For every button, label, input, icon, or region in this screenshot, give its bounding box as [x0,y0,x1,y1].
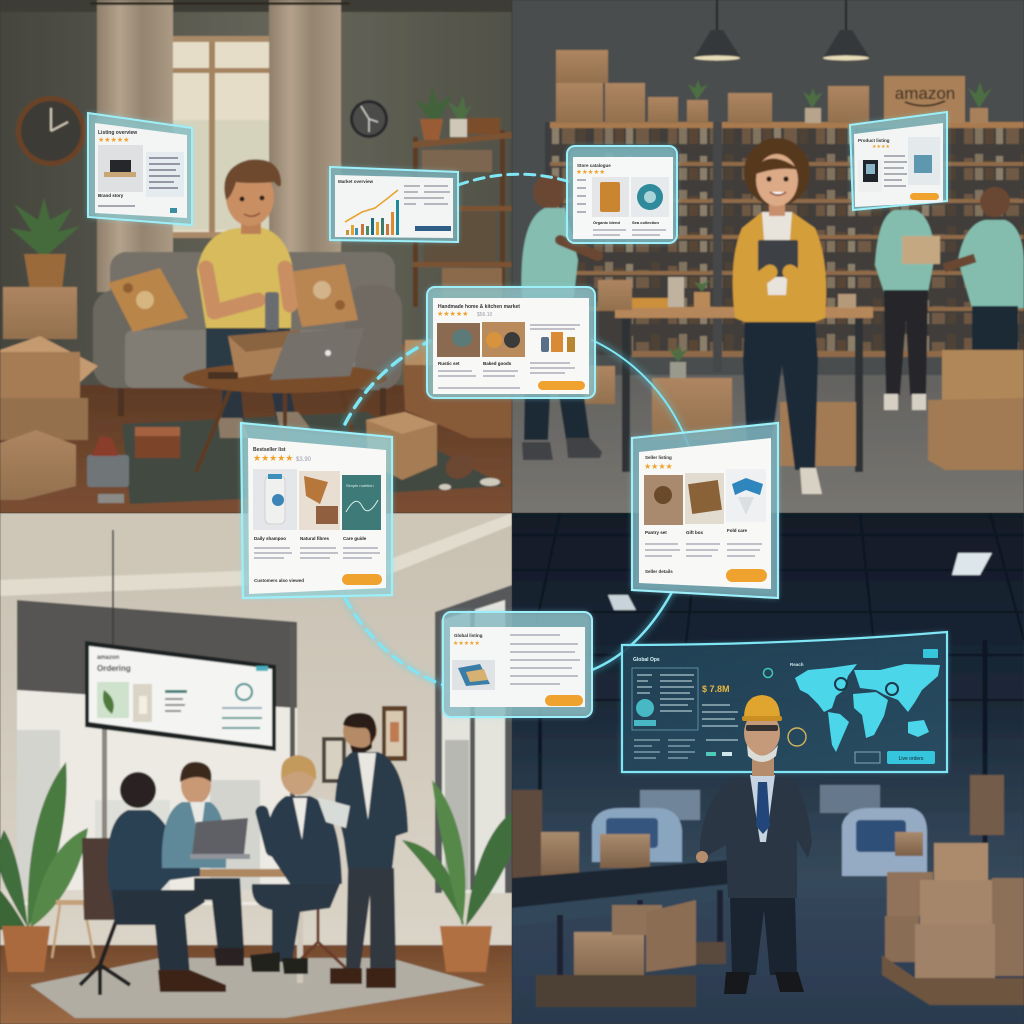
icon: small wall clock [350,100,388,138]
floating listing card right [632,423,778,598]
floating listing card 1: Listing overview [98,130,137,136]
wall monitor: Ordering [97,664,131,673]
floating analytics card with bar chart: Market overview [338,179,374,184]
floating listing card right: Pantry set [645,530,667,535]
right window [435,585,512,893]
floating listing card 3: ★★★★★ [576,168,605,176]
floating listing card 3: Store catalogue [577,163,611,168]
man in teal shirt, left [521,175,602,460]
sofa [93,252,402,416]
floor [512,375,1024,513]
parcels in front of the conveyor [536,900,726,1007]
boxes on the floor [585,350,1024,470]
floating listing card 4: Product listing [858,138,890,143]
rug [122,412,505,504]
connector: dashed glowing ring [345,174,690,685]
holographic world map dashboard [622,632,947,772]
hanging lamps [694,0,870,60]
woman in yellow cardigan [733,138,826,494]
top-shelf boxes [556,50,992,123]
floating listing card right: Seller details [645,569,673,574]
table [52,869,322,983]
box and tube on rug [87,412,500,503]
floating listing card 1 [88,113,192,225]
floating listing card lower left: Natural fibres [300,536,330,541]
floating listing card lower left: Bestseller list [253,447,286,453]
curtains [90,0,350,292]
stacked parcels on pallet [882,843,1024,1005]
packing machines [592,808,927,876]
floating listing card centre: Baked goods [483,361,512,366]
hanging pendant cable [112,530,114,645]
floating listing card right: Gift box [686,530,703,535]
work table [598,277,873,472]
shelving [545,122,1024,372]
cushions [108,264,358,332]
floor [0,945,512,1024]
panel: home seller room (top left) [0,0,512,513]
floating listing card lower left: Care guide [343,536,367,541]
large window with blind [0,600,300,905]
floating listing card centre: $56.10 [477,312,493,318]
holographic world map dashboard: $ 7.8M [702,684,730,694]
floating listing card lower left: Simple nutrition [346,483,374,488]
floating listing card centre: ★★★★★ [437,310,468,318]
floating listing card 4 [850,112,947,210]
floating listing card 3: Sea collection [632,220,659,225]
floor [0,385,512,513]
rug [30,958,485,1018]
roof beams [512,513,1024,890]
background wall windows [512,775,1004,880]
floating analytics card with bar chart [330,167,458,242]
shelf plants [415,86,472,140]
floating listing card lower left [241,423,392,598]
wall monitor: amazon [97,655,120,661]
holographic world map dashboard: Live orders [899,756,924,762]
world map [795,664,940,752]
floating listing card right: ★★★★ [644,462,673,471]
wall monitor [85,641,276,751]
team member with blonde hair [250,755,350,974]
floating listing card lower centre: ★★★★★ [453,640,480,647]
coffee table with box and laptop [183,328,387,472]
floating listing card centre: Handmade home & kitchen market [438,304,520,310]
team member with laptop [162,762,250,966]
shelf unit [413,118,512,308]
man in hard hat and suit [696,695,812,994]
factory floor [512,888,1024,1024]
floating listing card 4: ★★★★ [872,144,890,150]
floating listing card lower centre [443,612,592,717]
floating listing card centre: Rustic set [438,361,460,366]
floating listing card lower left: Customers also viewed [254,578,304,583]
man in yellow t-shirt [197,159,310,438]
amazon box: amazon [895,84,955,103]
floating listing card lower centre: Global listing [454,633,483,638]
floating listing card 1: ★★★★★ [98,136,129,144]
icon: large wall clock [16,96,86,166]
conveyor belt [512,860,730,990]
cardboard boxes, left stack [0,287,98,500]
floating listing card 1: Brand story [98,193,124,198]
window [172,35,270,239]
panel: warehouse shelf room (top right) [512,0,1024,513]
plant, left [0,762,88,972]
person holding a parcel [875,210,940,410]
team member seated from behind [80,772,226,995]
floating listing card lower left: ★★★★★ [253,453,293,463]
small parcels on belts [541,832,923,876]
amazon box [884,76,965,123]
floating listing card 3 [567,146,677,243]
panel: office meeting room (bottom left) [0,513,512,1024]
floating listing card lower left: Daily shampoo [254,536,286,541]
wall frames [322,706,407,783]
man on far right [944,187,1024,350]
floating listing card 3: Organic blend [593,220,620,225]
bar chart [345,190,399,235]
floating listing card right: Fold care [727,528,748,533]
floating listing card right: Seller listing [645,455,672,460]
plant, right [402,780,512,972]
standing team member [317,713,408,988]
floating listing card centre [427,287,595,398]
plant and basket, left [10,198,80,290]
large box behind table [402,332,512,438]
holographic world map dashboard: Global Ops [633,657,660,663]
floating listing card lower left: $3.90 [296,457,312,463]
holographic world map dashboard: Reach [790,662,804,667]
ceiling lights [608,553,992,610]
panel: global factory (bottom right) [512,513,1024,1024]
